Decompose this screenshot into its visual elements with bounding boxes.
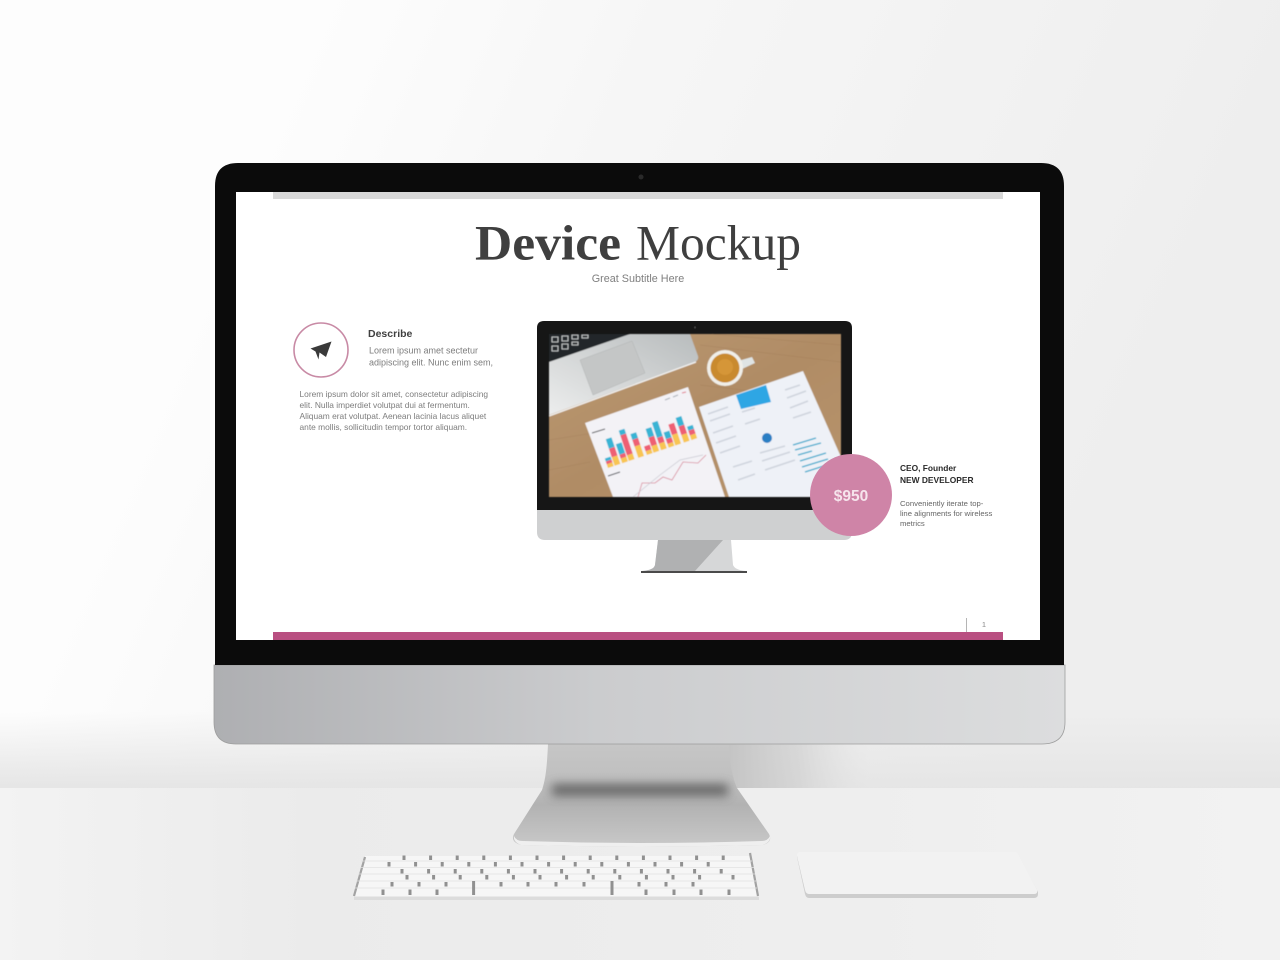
describe short text: adipiscing elit. Nunc enim sem, bbox=[369, 358, 493, 368]
laptop bbox=[549, 334, 698, 416]
small monitor stand bbox=[641, 540, 747, 573]
coffee cup bbox=[707, 350, 755, 386]
trackpad bbox=[797, 852, 1038, 898]
page number: 1 bbox=[982, 620, 986, 629]
wall floor shadow bbox=[0, 712, 1280, 789]
top grey bar bbox=[273, 192, 1003, 199]
bottom pink bar bbox=[273, 632, 1003, 640]
bar chart report bbox=[585, 387, 725, 497]
describe paragraph: ante mollis, sollicitudin tempor tortor aliquam. bbox=[300, 422, 467, 432]
monitor chin bbox=[214, 665, 1065, 744]
title: Device bbox=[475, 214, 621, 270]
role description: Conveniently iterate top- bbox=[900, 499, 984, 508]
describe short text: Lorem ipsum amet sectetur bbox=[369, 346, 478, 356]
title bbox=[475, 214, 801, 270]
keyboard bbox=[354, 853, 759, 900]
describe paragraph: elit. Nulla imperdiet volutpat dui at fermentum. bbox=[300, 400, 470, 410]
small monitor body bbox=[537, 321, 852, 540]
monitor stand bbox=[513, 744, 770, 846]
resume report bbox=[699, 371, 841, 497]
title: Mockup bbox=[636, 214, 801, 270]
describe paragraph: Lorem ipsum dolor sit amet, consectetur adipiscing bbox=[300, 389, 488, 399]
monitor bezel bbox=[215, 163, 1064, 665]
icon: paper plane in circle bbox=[294, 323, 348, 377]
role heading: NEW DEVELOPER bbox=[900, 475, 974, 485]
shadow on wall behind stand bbox=[729, 744, 869, 788]
price circle bbox=[810, 454, 892, 536]
role heading: CEO, Founder bbox=[900, 463, 957, 473]
describe paragraph: Aliquam erat volutpat. Aenean lacinia lacus aliquet bbox=[300, 411, 487, 421]
webcam bbox=[638, 174, 644, 180]
slide screen bbox=[236, 192, 1040, 640]
heading: describe: Describe bbox=[368, 328, 413, 340]
role description: metrics bbox=[900, 519, 925, 528]
desk photo bbox=[549, 334, 841, 497]
desk surface bbox=[0, 788, 1280, 960]
subtitle: Great Subtitle Here bbox=[592, 273, 684, 285]
role description: line alignments for wireless bbox=[900, 509, 992, 518]
price circle: $950 bbox=[834, 488, 868, 505]
page number bbox=[966, 618, 986, 632]
